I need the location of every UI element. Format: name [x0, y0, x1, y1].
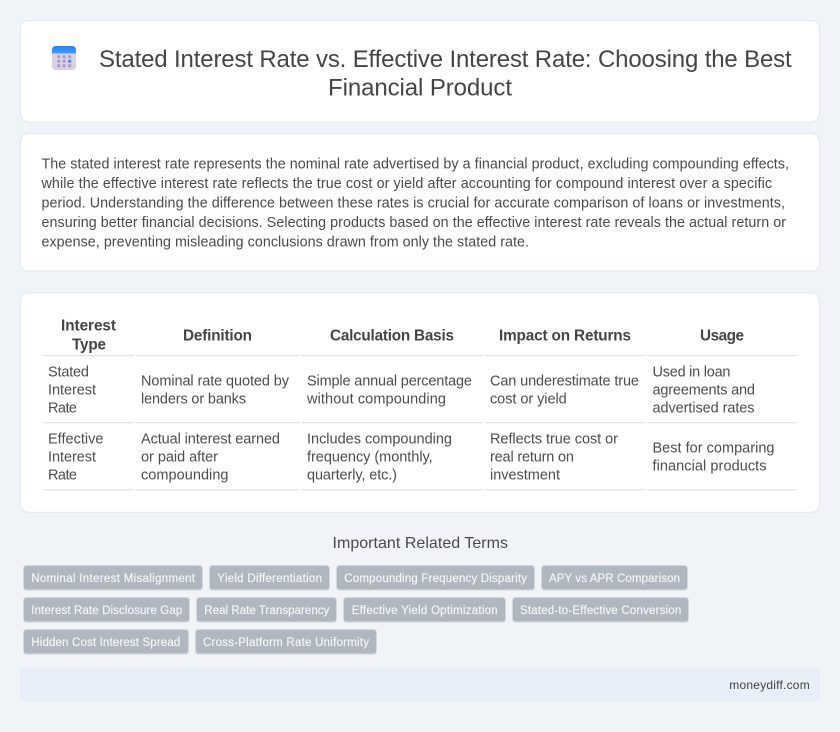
tag: Yield Differentiation: [217, 573, 322, 585]
table row: stated interest rate: Interest: [48, 383, 96, 399]
table row: effective interest rate: Best for comparing: [652, 441, 774, 457]
tag: [344, 598, 506, 622]
tag list: related terms: [24, 566, 688, 654]
table header row: Usage: [700, 328, 744, 345]
icon: calendar: [52, 46, 76, 70]
tag: Cross-Platform Rate Uniformity: [203, 637, 369, 649]
table row: effective interest rate: or paid after: [141, 450, 218, 466]
footer: moneydiff.com: [729, 678, 810, 692]
table header row: Calculation Basis: [330, 328, 454, 345]
tag: [24, 630, 188, 654]
footer: [20, 668, 820, 702]
text block: summary paragraph: period. Understanding the difference between these rates is crucial for accurate comparison of loans or investments,: [42, 195, 785, 211]
text block: summary paragraph: while the effective interest rate reflects the true cost or yield after accounting for compound interest over a specific: [40, 176, 772, 192]
table row: effective interest rate: quarterly, etc.): [307, 468, 397, 484]
table row: stated interest rate: advertised rates: [652, 401, 754, 417]
tag: [196, 630, 376, 654]
table row: stated interest rate: Can underestimate true: [490, 374, 639, 390]
table row: effective interest rate: Effective: [48, 432, 104, 448]
tag: Compounding Frequency Disparity: [344, 573, 527, 585]
table row: stated interest rate: Rate: [48, 401, 77, 417]
panel: header: [20, 20, 820, 122]
table row: effective interest rate: Includes compounding: [307, 432, 452, 448]
table header row: Impact on Returns: [499, 328, 631, 345]
tag: [24, 598, 190, 622]
text block: summary paragraph: ensuring better financial decisions. Selecting products based on the effective interest rate reveals the actual return or: [42, 215, 786, 231]
table header row: Interest: [61, 318, 116, 335]
table row: effective interest rate: Rate: [48, 468, 77, 484]
heading: important related terms: Important Related Terms: [332, 535, 508, 552]
tag: [542, 566, 688, 590]
table row: effective interest rate: financial products: [652, 459, 766, 475]
table row: stated interest rate: Simple annual percentage: [307, 374, 472, 390]
tag: [210, 566, 330, 590]
table header row: Definition: [183, 328, 252, 345]
panel: intro text: [20, 134, 820, 271]
text block: summary paragraph: expense, preventing misleading conclusions drawn from only the stated rate.: [42, 234, 529, 250]
table row: effective interest rate: Reflects true cost or: [490, 432, 618, 448]
table header row: [61, 318, 744, 354]
table row: effective interest rate: investment: [490, 468, 560, 484]
table row: effective interest rate: real return on: [490, 450, 574, 466]
table row: stated interest rate: Stated: [48, 365, 89, 381]
table row: effective interest rate: [48, 432, 774, 484]
title: [99, 46, 792, 102]
tag: Real Rate Transparency: [204, 605, 330, 617]
tag: [336, 566, 534, 590]
table row: effective interest rate: frequency (monthly,: [307, 450, 433, 466]
title: Stated Interest Rate vs. Effective Interest Rate: Choosing the Best: [99, 46, 792, 73]
tag: Effective Yield Optimization: [352, 605, 498, 617]
table row: stated interest rate: lenders or banks: [141, 392, 246, 408]
title: Financial Product: [328, 74, 512, 102]
table header row: Type: [72, 337, 106, 354]
table row: effective interest rate: compounding: [141, 468, 228, 484]
table row: effective interest rate: Actual interest earned: [141, 432, 280, 448]
tag: [196, 598, 336, 622]
table row: stated interest rate: Nominal rate quoted by: [141, 374, 290, 390]
table row: effective interest rate: Interest: [48, 450, 96, 466]
tag: Hidden Cost Interest Spread: [31, 637, 180, 649]
tag: [512, 598, 688, 622]
tag: APY vs APR Comparison: [549, 573, 680, 585]
table row: stated interest rate: cost or yield: [490, 392, 567, 408]
tag: [24, 566, 202, 590]
table row: stated interest rate: [48, 365, 755, 417]
tag: Interest Rate Disclosure Gap: [31, 605, 182, 617]
text block: summary paragraph: [40, 156, 789, 250]
table row: stated interest rate: without compounding: [306, 392, 446, 408]
table row: stated interest rate: agreements and: [652, 383, 755, 399]
table row: stated interest rate: Used in loan: [652, 365, 730, 381]
text block: summary paragraph: The stated interest rate represents the nominal rate advertised by a financial product, excluding compounding effects,: [42, 156, 789, 172]
tag: Nominal Interest Misalignment: [31, 573, 196, 585]
panel: comparison table: [20, 293, 820, 512]
tag: Stated-to-Effective Conversion: [520, 605, 681, 617]
